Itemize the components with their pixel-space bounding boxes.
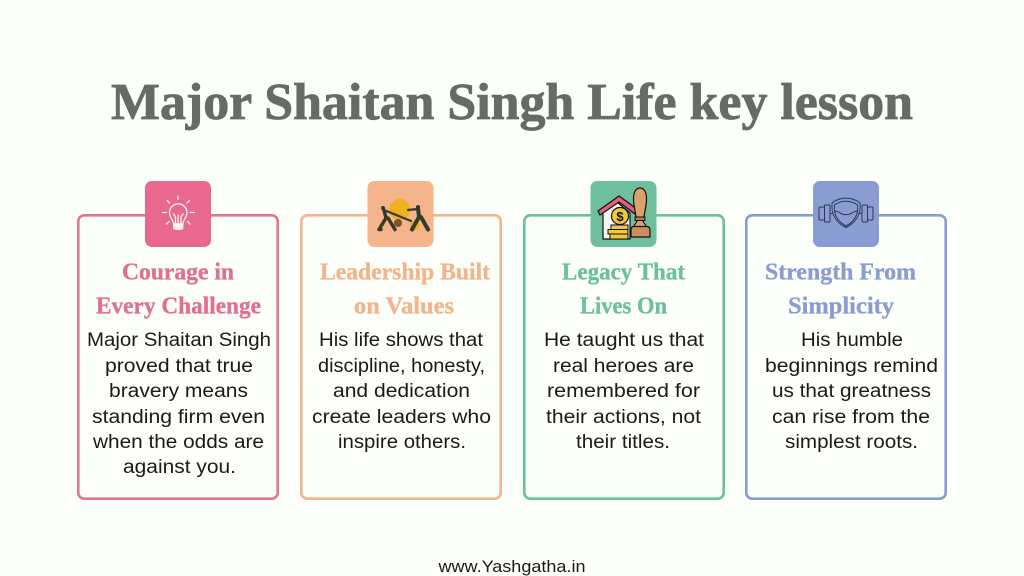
text: leadership: and dedication	[333, 381, 470, 402]
text: courage: standing firm even	[92, 407, 265, 428]
heading: strength: Simplicity	[788, 294, 894, 320]
heading: leadership	[320, 260, 490, 320]
text: strength: His humble	[801, 330, 903, 351]
text: legacy: real heroes are	[553, 356, 694, 377]
text: courage: when the odds are	[92, 432, 264, 453]
heading: courage	[96, 260, 261, 320]
text: legacy: He taught us that	[544, 330, 705, 351]
icon: house and stamp: $	[616, 209, 624, 224]
text: strength: beginnings remind	[765, 356, 938, 377]
heading: courage: Every Challenge	[96, 294, 261, 320]
text: leadership	[312, 330, 491, 453]
text: courage: Major Shaitan Singh	[87, 330, 271, 351]
text: courage: proved that true	[105, 356, 253, 377]
text: courage: against you.	[123, 457, 236, 478]
heading: courage: Courage in	[122, 260, 234, 286]
text: legacy: remembered for	[547, 381, 701, 402]
icon: light bulb	[145, 181, 211, 247]
title: Major Shaitan Singh Life key lesson	[111, 74, 913, 131]
icon: shield and dumbbell	[813, 181, 879, 247]
heading: strength	[765, 260, 916, 320]
text: strength: can rise from the	[772, 407, 930, 428]
text: courage: bravery means	[109, 381, 248, 402]
text: strength	[765, 330, 938, 453]
text: courage	[87, 330, 271, 478]
text: leadership: create leaders who	[312, 407, 491, 428]
heading: legacy: Legacy That	[562, 260, 685, 286]
heading: legacy	[562, 260, 685, 320]
panel: strength	[746, 181, 946, 499]
heading: strength: Strength From	[765, 260, 916, 286]
footer: website: www.Yashgatha.in	[437, 558, 586, 576]
panel: legacy	[524, 181, 724, 499]
text: legacy: their titles.	[576, 432, 670, 453]
icon: figures lifting bulb	[368, 181, 434, 247]
text: leadership: inspire others.	[338, 432, 466, 453]
text: strength: us that greatness	[772, 381, 931, 402]
text: legacy	[544, 330, 705, 453]
icon: house and stamp	[590, 181, 656, 247]
heading: legacy: Lives On	[580, 294, 667, 320]
panel: courage	[78, 181, 278, 499]
panel: leadership	[301, 181, 501, 499]
heading: leadership: on Values	[354, 294, 454, 320]
text: strength: simplest roots.	[785, 432, 918, 453]
text: leadership: discipline, honesty,	[318, 356, 485, 377]
heading: leadership: Leadership Built	[320, 260, 490, 286]
text: leadership: His life shows that	[319, 330, 484, 351]
text: legacy: their actions, not	[546, 407, 702, 428]
